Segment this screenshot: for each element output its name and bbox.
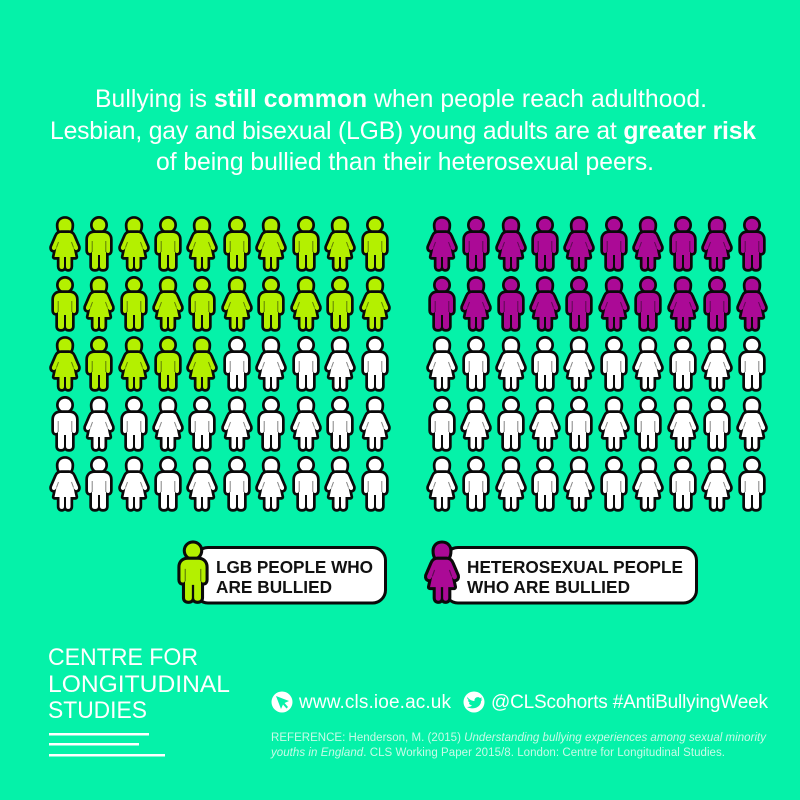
reference text — [270, 732, 767, 759]
legend: LGB people who are bullied: LGB PEOPLE WHO — [216, 557, 373, 577]
legend: heterosexual people who are bullied — [427, 544, 696, 603]
twitter handle and hashtag: @CLScohorts #AntiBullyingWeek — [491, 692, 768, 713]
reference text: youths in England. CLS Working Paper 2015/8. London: Centre for Longitudinal Studies. — [270, 747, 725, 759]
website address: www.cls.ioe.ac.uk — [298, 692, 452, 713]
legend: heterosexual people who are bullied: HETEROSEXUAL PEOPLE — [467, 557, 683, 577]
pictogram: heterosexual people, 20 of 100 bullied — [429, 219, 765, 509]
pictogram: LGB people, 25 of 100 bullied — [52, 219, 388, 509]
heading text: Lesbian, gay and bisexual (LGB) young adults are at greater risk — [50, 118, 756, 145]
heading text: Bullying is still common when people reach adulthood. — [95, 86, 707, 113]
heading text: of being bullied than their heterosexual peers. — [156, 149, 654, 176]
logo: Centre for Longitudinal Studies: LONGITUDINAL — [48, 671, 230, 698]
icon: website cursor — [272, 692, 292, 712]
legend: LGB people who are bullied — [180, 543, 386, 603]
logo: Centre for Longitudinal Studies: STUDIES — [48, 697, 147, 724]
icon: twitter bird — [464, 692, 484, 712]
logo: Centre for Longitudinal Studies — [48, 644, 230, 756]
legend: LGB people who are bullied: ARE BULLIED — [216, 577, 332, 597]
reference text: REFERENCE: Henderson, M. (2015) Understanding bullying experiences among sexual minority — [271, 732, 767, 744]
logo: Centre for Longitudinal Studies: CENTRE FOR — [48, 644, 198, 671]
heading text — [50, 86, 756, 176]
legend: heterosexual people who are bullied: WHO ARE BULLIED — [467, 577, 630, 597]
